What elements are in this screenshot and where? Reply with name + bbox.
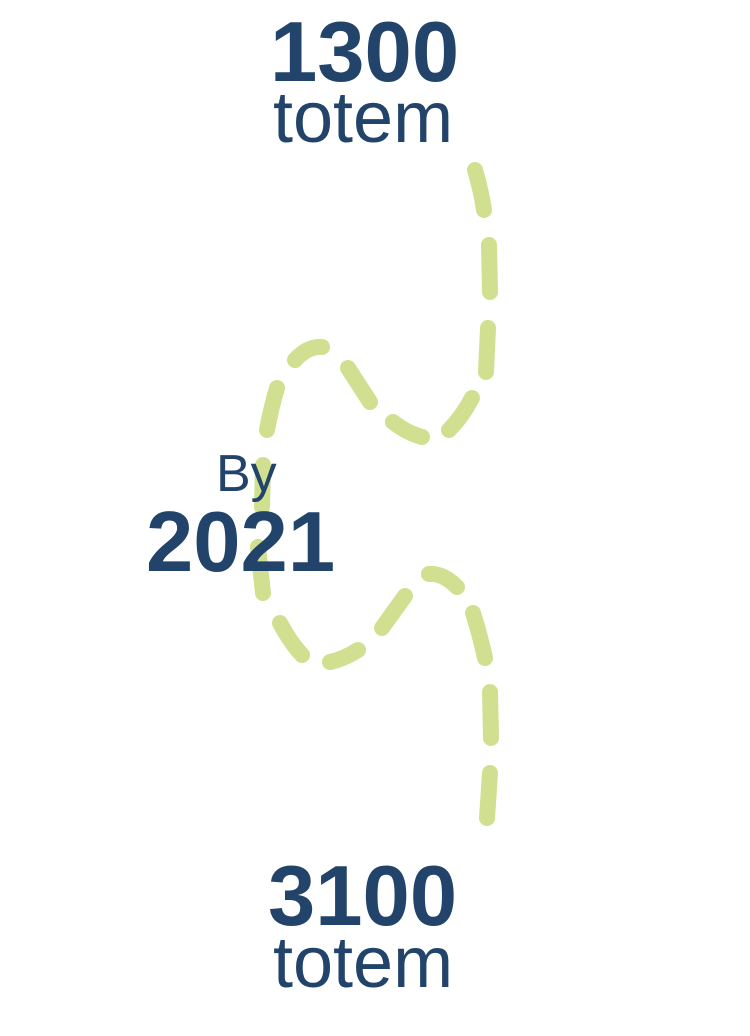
number 1300: 1300	[270, 5, 459, 100]
stat: By 2021	[146, 445, 335, 590]
label totem: totem	[273, 923, 453, 1003]
stat: 1300 totem	[270, 5, 459, 158]
label By: By	[216, 445, 277, 503]
year 2021: 2021	[146, 495, 335, 590]
stat: 3100 totem	[268, 849, 457, 1003]
number 3100: 3100	[268, 849, 457, 944]
label totem: totem	[273, 78, 453, 158]
